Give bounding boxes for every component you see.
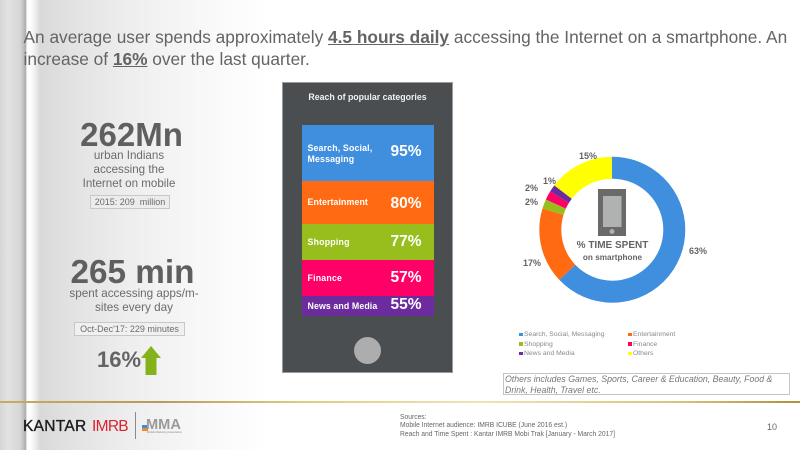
donut centre label: % TIME SPENT [577,240,648,251]
donut chart: time spent [539,156,686,303]
sources: Mobile Internet audience: IMRB ICUBE (June 2016 est.) [400,420,567,429]
logo: MMA: Mobile Marketing Association [147,430,182,434]
row: news and media: 55% [390,296,422,313]
logo: MMA: MMA [146,417,181,433]
chart legend: Others [633,350,653,357]
sources [400,412,615,438]
row: search social messaging: Search, Social, [308,142,372,152]
stat: 262Mn urban users [80,116,183,209]
icon: green up arrow [141,346,161,375]
chart legend [519,331,676,357]
logo divider [135,412,136,439]
row: search social messaging [302,125,434,180]
sources: Reach and Time Spent : Kantar IMRB Mobi Trak [January - March 2017] [400,429,615,438]
donut label: 17%: 17% [523,258,541,268]
page number: 10 [767,422,777,432]
stat value: 262Mn [80,116,183,153]
row: news and media: News and Media [308,300,377,310]
logo: Kantar IMRB [23,418,128,434]
logo wordmark: IMRB: IMRB [92,418,128,434]
row: shopping: Shopping [308,237,350,247]
stat description: accessing the [94,163,164,176]
stat description: Internet on mobile [83,177,175,190]
donut label: 1%: 1% [543,176,556,186]
chart legend: Finance [633,340,657,348]
panel heading: Reach of popular categories [308,92,427,102]
phone home button [354,337,381,364]
sources: Sources: [400,412,427,421]
icon: smartphone [598,189,626,236]
stat description [83,149,175,190]
donut label: 15%: 15% [579,151,597,161]
row: finance [302,260,434,296]
title: An average user spends approximately 4.5 hours daily accessing the Internet on a smartphone. An [24,27,787,47]
growth percent: 16% [97,347,141,372]
chart legend: News and Media [524,350,575,357]
comparison box [90,195,170,209]
row: news and media [302,296,434,316]
comparison box [74,322,185,336]
row: entertainment [302,180,434,224]
row: finance: Finance [308,272,342,282]
chart legend: Shopping [524,340,553,348]
stat description [69,287,199,314]
donut centre label: on smartphone [583,253,642,262]
panel: phone reach of popular categories [282,82,453,373]
stat description: spent accessing apps/m- [69,287,199,300]
stat description: urban Indians [94,149,164,162]
row: finance: 57% [390,268,422,286]
donut centre label [576,240,648,262]
donut label: 2% finance: 2% [525,183,538,193]
row: entertainment: 80% [390,194,422,212]
footnote: others includes: Others includes Games, Sports, Career & Education, Beauty, Food & Drink, Health, Travel etc. [505,374,772,395]
chart legend: Entertainment [633,331,675,338]
row: search social messaging: 95% [390,143,422,160]
chart legend: Search, Social, Messaging [524,331,604,338]
donut label: 63%: 63% [689,246,707,256]
donut label: 2% shopping: 2% [525,197,538,207]
title [24,27,787,69]
row: shopping: 77% [390,232,422,250]
row: shopping [302,224,434,260]
comparison box: Oct-Dec'17: 229 minutes [80,324,179,334]
comparison box: 2015: 209 million [95,197,165,207]
stat description: sites every day [95,301,173,314]
row: search social messaging: Messaging [308,154,354,164]
footer divider [0,401,800,403]
stat: 265 min daily [69,254,199,375]
title: increase of 16% over the last quarter. [24,49,310,69]
stat value: 265 min [70,254,194,291]
logo wordmark: Kantar: KANTAR [23,418,87,434]
row: entertainment: Entertainment [308,197,368,207]
